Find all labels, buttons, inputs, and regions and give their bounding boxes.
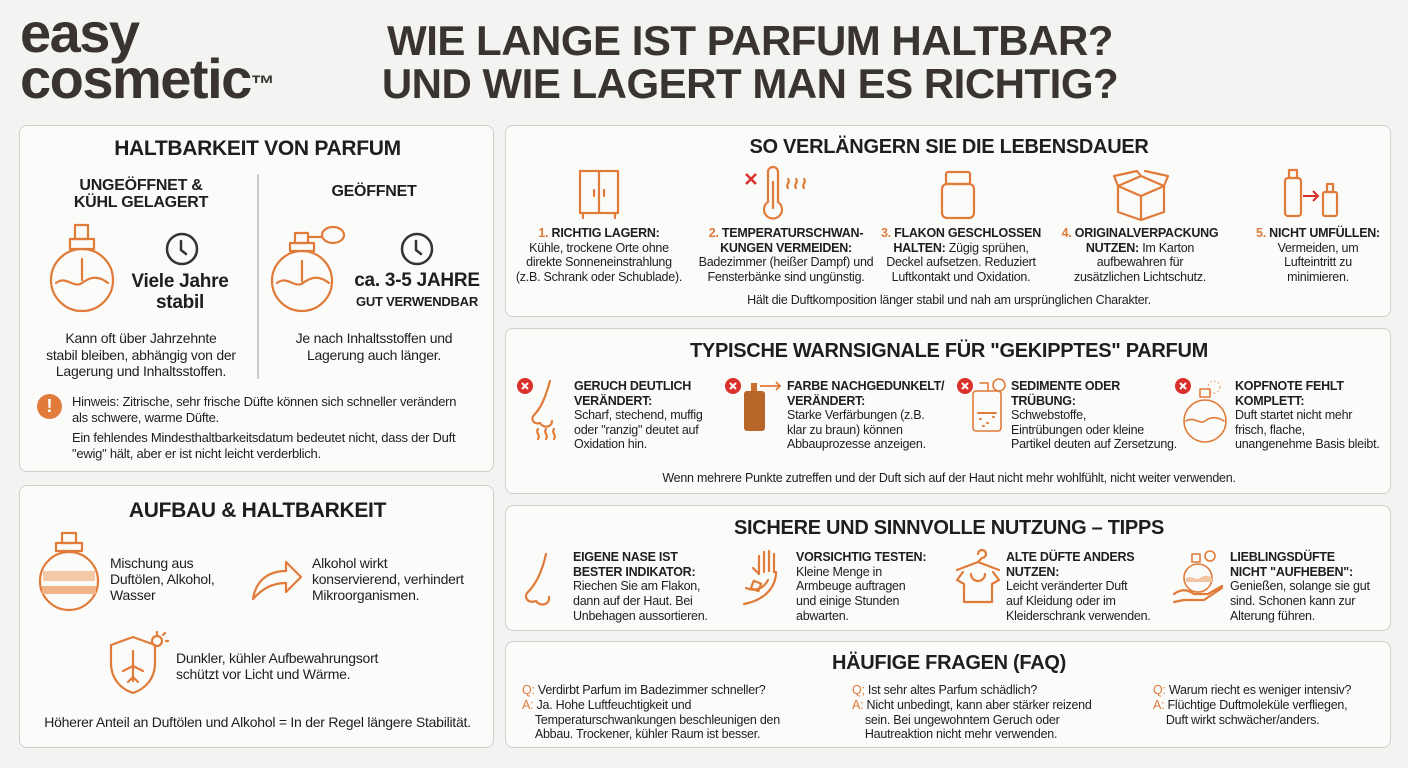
text: nase: Riechen Sie am Flakon, — [573, 579, 700, 593]
text: 3-5 jahre: GUT VERWENDBAR — [356, 294, 478, 309]
text: testen: abwarten. — [796, 609, 849, 623]
icon: warning: ! — [46, 396, 52, 416]
text: geruch: Oxidation hin. — [574, 437, 647, 451]
faq 1 — [522, 683, 780, 742]
subheading: ungeöffnet: UNGEÖFFNET & — [79, 177, 203, 194]
footer: Wenn mehrere Punkte zutreffen und der Duft sich auf der Haut nicht mehr wohlfühlt, nicht weiter verwenden. — [662, 471, 1236, 485]
text: 3: Luftkontakt und Oxidation. — [892, 270, 1030, 284]
icon: box — [1112, 170, 1170, 222]
caption left — [46, 330, 236, 379]
faq 1: Q: Verdirbt Parfum im Badezimmer schneller? — [522, 683, 766, 697]
text: lieblingsdüfte: sind. Schonen kann zur — [1230, 594, 1355, 608]
logo — [20, 1, 275, 110]
faq 3 — [1153, 683, 1351, 727]
icon: nose — [524, 552, 550, 606]
panel: Aufbau & Haltbarkeit — [19, 485, 494, 748]
text: kopfnote: Duft startet nicht mehr — [1235, 408, 1352, 422]
text: alkohol: Alkohol wirkt — [312, 555, 387, 571]
icon: clock 2 — [400, 232, 434, 266]
panel: So verlängern — [505, 125, 1391, 317]
hinweis text: als schwere, warme Düfte. — [72, 410, 219, 424]
text: sedimente: TRÜBUNG: — [1011, 394, 1076, 408]
text: 4: NUTZEN: Im Karton — [1086, 240, 1194, 254]
title: WIE LANGE IST PARFUM HALTBAR? — [387, 17, 1113, 64]
icon: bottle closed — [50, 224, 114, 312]
heading: HÄUFIGE FRAGEN (FAQ) — [832, 652, 1066, 674]
text: mischung — [110, 555, 214, 603]
text: 4 — [1062, 226, 1218, 284]
caption right: Je nach Inhaltsstoffen und — [296, 330, 452, 346]
text: 1: direkte Sonneneinstrahlung — [526, 255, 672, 269]
hinweis text: Hinweis: Zitrische, sehr frische Düfte können sich schneller verändern — [72, 394, 456, 409]
icon: warning — [37, 394, 62, 419]
text: kopfnote: KOMPLETT: — [1235, 394, 1304, 408]
heading: SO VERLÄNGERN SIE DIE LEBENSDAUER — [749, 136, 1149, 158]
heading: TYPISCHE WARNSIGNALE FÜR "GEKIPPTES" PARFUM — [690, 340, 1208, 362]
text: 3-5 jahre — [354, 270, 480, 309]
text: 5: Vermeiden, um — [1278, 240, 1358, 254]
text: 5: 5. NICHT UMFÜLLEN: — [1256, 226, 1380, 240]
icon: fading bottle — [1175, 378, 1227, 443]
text: mischung: Duftölen, Alkohol, — [110, 571, 214, 587]
text: nase: Unbehagen aussortieren. — [573, 609, 708, 623]
caption right: Lagerung auch länger. — [307, 346, 441, 362]
text: lieblingsdüfte: Genießen, solange sie gut — [1230, 579, 1370, 593]
text: 2: Fensterbänke sind ungünstig. — [708, 270, 864, 284]
text: geruch: GERUCH DEUTLICH — [574, 379, 691, 393]
text: geruch: oder "ranzig" deutet auf — [574, 422, 698, 436]
text: 1: Kühle, trockene Orte ohne — [529, 240, 669, 254]
logo: cosmetic™ — [20, 47, 275, 110]
icon: shield — [110, 630, 170, 694]
icon: arm — [742, 550, 778, 606]
text: farbe: Abbauprozesse anzeigen. — [787, 437, 926, 451]
text: testen: Kleine Menge in — [796, 565, 882, 579]
heading: SICHERE UND SINNVOLLE NUTZUNG – TIPPS — [734, 517, 1164, 539]
text: kopfnote: unangenehme Basis bleibt. — [1235, 437, 1380, 451]
text: alkohol — [312, 555, 464, 603]
text: nase: dann auf der Haut. Bei — [573, 594, 693, 608]
panel: Haltbarkeit von Parfum: Ein fehlendes Mindesthaltbarkeitsdatum bedeutet nicht, dass der Duft — [72, 430, 455, 445]
text: alte düfte: auf Kleidung oder im — [1006, 594, 1116, 608]
caption right — [296, 330, 452, 363]
faq 3: Duft wirkt schwächer/anders. — [1166, 713, 1319, 727]
text: 2: KUNGEN VERMEIDEN: — [720, 240, 852, 254]
text: farbe — [787, 379, 944, 451]
title: UND WIE LAGERT MAN ES RICHTIG? — [382, 60, 1118, 107]
icon: dark bottle — [725, 378, 782, 431]
faq 1: Abbau. Trockener, kühler Raum ist besser. — [535, 727, 760, 741]
text: viele jahre: Viele Jahre — [131, 271, 229, 292]
text: alte düfte: Leicht veränderter Duft — [1006, 579, 1127, 593]
text: viele jahre — [131, 271, 229, 313]
text: 5 — [1256, 226, 1380, 284]
text: 4: zusätzlichen Lichtschutz. — [1074, 270, 1206, 284]
text: farbe: Starke Verfärbungen (z.B. — [787, 408, 925, 422]
text: testen — [796, 550, 926, 623]
panel: FAQ — [505, 641, 1391, 748]
icon: sediment bottle — [957, 378, 1006, 432]
text: sedimente: Schwebstoffe, — [1011, 408, 1086, 422]
text: 2 — [699, 226, 873, 284]
text: sedimente: SEDIMENTE ODER — [1011, 379, 1120, 393]
panel: Haltbarkeit von Parfum — [19, 125, 494, 472]
text: 3: 3. FLAKON GESCHLOSSEN — [881, 226, 1041, 240]
text: 5: minimieren. — [1287, 270, 1349, 284]
faq 1: A: Ja. Hohe Luftfeuchtigkeit und — [522, 698, 691, 712]
icon: clock — [166, 232, 198, 266]
text: viele jahre: stabil — [156, 292, 204, 313]
text: farbe: FARBE NACHGEDUNKELT/ — [787, 379, 944, 393]
faq 3: Q: Warum riecht es weniger intensiv? — [1153, 683, 1351, 697]
faq 1: Temperaturschwankungen beschleunigen den — [535, 713, 780, 727]
icon: thermometer — [745, 166, 806, 220]
faq 2: A: Nicht unbedingt, kann aber stärker reizend — [852, 698, 1092, 712]
icon: hand bottle — [1172, 550, 1228, 606]
text: 3 — [881, 226, 1041, 284]
text: lieblingsdüfte: Alterung führen. — [1230, 609, 1315, 623]
text: geruch: VERÄNDERT: — [574, 394, 652, 408]
bottom text: Höherer Anteil an Duftölen und Alkohol = In der Regel längere Stabilität. — [44, 714, 471, 730]
text: alte düfte: ALTE DÜFTE ANDERS — [1006, 550, 1134, 564]
caption left: stabil bleiben, abhängig von der — [46, 346, 236, 362]
text: mischung: Wasser — [110, 587, 155, 603]
panel: Warnsignale — [505, 328, 1391, 494]
text: sedimente: Partikel deuten auf Zersetzung. — [1011, 437, 1177, 451]
text: 1: 1. RICHTIG LAGERN: — [538, 226, 660, 240]
text: lieblingsdüfte — [1230, 550, 1370, 624]
icon: shirt — [953, 550, 1003, 604]
icon: cabinet — [578, 170, 620, 220]
text: sedimente: Eintrübungen oder kleine — [1011, 422, 1144, 436]
text: nase: BESTER INDIKATOR: — [573, 565, 695, 579]
faq 3: A: Flüchtige Duftmoleküle verfliegen, — [1153, 698, 1347, 712]
text: sedimente — [1011, 379, 1177, 451]
text: kopfnote: frisch, flache, — [1235, 422, 1305, 436]
heading: AUFBAU & HALTBARKEIT — [129, 499, 386, 522]
text: alkohol: Mikroorganismen. — [312, 587, 419, 603]
text: 1: (z.B. Schrank oder Schublade). — [516, 270, 682, 284]
text: alte düfte: Kleiderschrank verwenden. — [1006, 609, 1151, 623]
text: 4: aufbewahren für — [1097, 255, 1183, 269]
text: testen: Armbeuge auftragen — [796, 579, 905, 593]
footer: Hält die Duftkomposition länger stabil und nah am ursprünglichen Charakter. — [747, 293, 1151, 307]
text: alte düfte — [1006, 550, 1151, 624]
text: dunkler: Dunkler, kühler Aufbewahrungsort — [176, 650, 378, 666]
text: 4: 4. ORIGINALVERPACKUNG — [1062, 226, 1218, 240]
faq 2: Q; Ist sehr altes Parfum schädlich? — [852, 683, 1037, 697]
icon: nose — [517, 378, 556, 440]
text: geruch: Scharf, stechend, muffig — [574, 408, 703, 422]
subheading: ungeöffnet — [74, 176, 208, 211]
text: 3: HALTEN: Zügig sprühen, — [893, 240, 1029, 254]
text: dunkler: schützt vor Licht und Wärme. — [176, 666, 350, 682]
text: 2: 2. TEMPERATURSCHWAN- — [709, 226, 863, 240]
faq 2: sein. Bei ungewohntem Geruch oder — [865, 713, 1060, 727]
heading: HALTBARKEIT VON PARFUM — [114, 137, 401, 160]
text: farbe: klar zu braun) können — [787, 422, 903, 436]
text: 3: Deckel aufsetzen. Reduziert — [886, 255, 1036, 269]
hinweis text — [72, 394, 456, 424]
text: 3-5 jahre: ca. 3-5 JAHRE — [354, 270, 480, 291]
panel: Haltbarkeit von Parfum: "ewig" hält, aber er ist nicht leicht verderblich. — [72, 446, 321, 460]
icon: bottles transfer — [1284, 168, 1338, 218]
caption left: Lagerung und Inhaltsstoffen. — [56, 363, 226, 379]
caption left: Kann oft über Jahrzehnte — [65, 330, 217, 346]
icon: bottle open — [270, 226, 346, 312]
icon: arrow — [252, 560, 302, 600]
text: alte düfte: NUTZEN: — [1006, 565, 1059, 579]
text: nase — [573, 550, 708, 623]
subheading: ungeöffnet: KÜHL GELAGERT — [74, 194, 208, 211]
icon: bottle layers — [38, 532, 100, 612]
text: 2: Badezimmer (heißer Dampf) und — [699, 255, 873, 269]
text: geruch — [574, 379, 703, 451]
text: nase: EIGENE NASE IST — [573, 550, 678, 564]
text: kopfnote: KOPFNOTE FEHLT — [1235, 379, 1344, 393]
icon: flacon — [940, 170, 976, 220]
subheading: geöffnet: GEÖFFNET — [331, 183, 417, 200]
title — [382, 17, 1118, 107]
logo: easy — [20, 1, 139, 64]
text: farbe: VERÄNDERT: — [787, 394, 865, 408]
text: dunkler — [176, 650, 378, 682]
text: kopfnote — [1235, 379, 1380, 451]
text: 5: Lufteintritt zu — [1284, 255, 1352, 269]
panel: Tipps — [505, 505, 1391, 631]
text: testen: VORSICHTIG TESTEN: — [796, 550, 926, 564]
text: mischung: Mischung aus — [110, 555, 193, 571]
text: 1 — [516, 226, 682, 284]
text: lieblingsdüfte: LIEBLINGSDÜFTE — [1230, 550, 1335, 564]
faq 2: Hautreaktion nicht mehr verwenden. — [865, 727, 1057, 741]
text: testen: und einige Stunden — [796, 594, 899, 608]
text: alkohol: konservierend, verhindert — [312, 571, 464, 587]
faq 2 — [852, 683, 1092, 742]
text: lieblingsdüfte: NICHT "AUFHEBEN": — [1230, 565, 1353, 579]
